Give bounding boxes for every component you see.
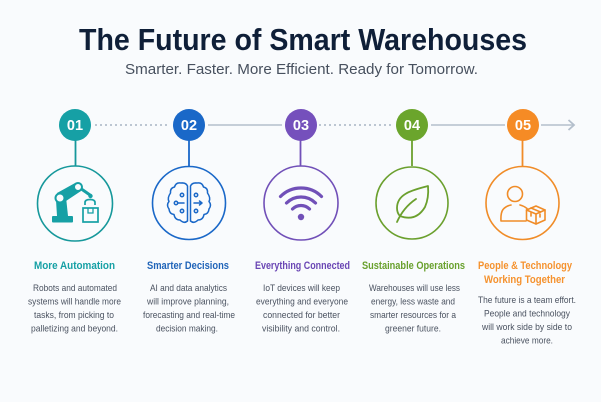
description: palletizing and beyond.: [31, 324, 118, 334]
description: The future is a team effort.: [478, 295, 576, 305]
heading: Everything Connected: [255, 260, 350, 272]
icon: robot arm with package: [38, 166, 112, 241]
icon: wifi: [264, 166, 338, 240]
description: will improve planning,: [146, 296, 229, 306]
description: smarter resources for a: [370, 310, 457, 320]
description: everything and everyone: [256, 296, 348, 306]
description: [478, 295, 576, 346]
step badge 03: 03: [293, 118, 309, 134]
step badge 05: [507, 109, 539, 166]
step 01: more automation: [28, 109, 121, 334]
heading: More Automation: [34, 260, 115, 272]
icon: brain: [152, 166, 226, 240]
description: achieve more.: [501, 336, 553, 346]
icon: leaf: [376, 167, 448, 239]
description: Robots and automated: [33, 283, 117, 293]
step 02: smarter decisions: [143, 109, 235, 334]
step badge 01: 01: [67, 118, 83, 134]
description: connected for better: [263, 310, 340, 320]
description: systems will handle more: [28, 296, 121, 306]
heading: Working Together: [484, 274, 566, 286]
description: decision making.: [156, 324, 218, 334]
heading: People & Technology: [478, 260, 573, 272]
icon: person with package: [486, 166, 559, 240]
subtitle: Smarter. Faster. More Efficient. Ready for Tomorrow.: [125, 62, 478, 78]
step 05: people and technology: [478, 109, 576, 346]
description: energy, less waste and: [371, 296, 455, 306]
step badge 04: [396, 109, 428, 166]
description: People and technology: [484, 308, 570, 318]
description: forecasting and real-time: [143, 310, 235, 320]
description: greener future.: [385, 324, 441, 334]
step badge 02: [173, 109, 205, 166]
description: tasks, from picking to: [34, 310, 114, 320]
description: visibility and control.: [262, 324, 340, 334]
description: [143, 283, 235, 334]
description: [369, 283, 460, 334]
heading: Smarter Decisions: [147, 260, 229, 272]
heading: [478, 260, 573, 286]
description: will work side by side to: [481, 322, 572, 332]
description: [28, 283, 121, 334]
step 04: sustainable operations: [362, 109, 465, 334]
description: IoT devices will keep: [263, 283, 340, 293]
heading: Sustainable Operations: [362, 260, 465, 272]
step badge 04: 04: [404, 118, 420, 134]
description: Warehouses will use less: [369, 283, 460, 293]
timeline connectors: [95, 120, 574, 130]
description: AI and data analytics: [150, 283, 227, 293]
step badge 05: 05: [515, 118, 531, 134]
step 03: everything connected: [255, 109, 350, 334]
description: [256, 283, 348, 334]
step badge 02: 02: [181, 118, 197, 134]
title: The Future of Smart Warehouses: [79, 23, 527, 57]
step badge 01: [59, 109, 91, 166]
step badge 03: [285, 109, 317, 166]
